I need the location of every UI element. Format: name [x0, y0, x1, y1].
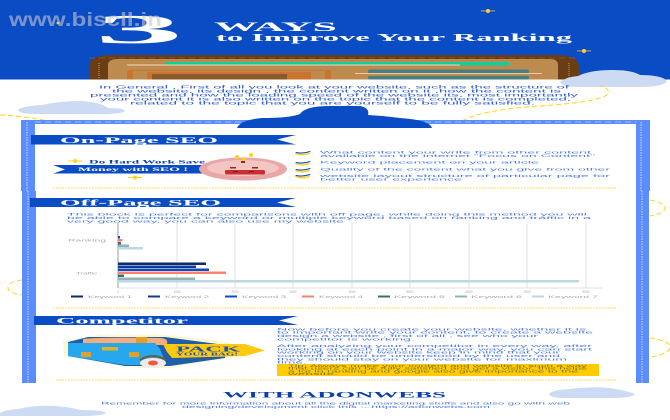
- on-page checklist text: better user experience: [320, 178, 462, 182]
- competitor text: time.: [277, 360, 307, 364]
- bar chart: 8000: [582, 290, 590, 294]
- competitor text: design a website , first of all , see who your: [277, 334, 541, 338]
- bar chart: 2000: [231, 290, 239, 294]
- chart legend: Keyword 7: [548, 295, 599, 299]
- footer heading: WITH ADONWEBS: [223, 389, 446, 399]
- watermark: www.biscll.in: [8, 10, 162, 31]
- dashed path decoration: [0, 86, 670, 357]
- section banner: Off-Page SEO: [30, 198, 296, 208]
- tip callout: a lot in ranking and google also give importance to the: [288, 369, 579, 373]
- chart legend: Keyword 3: [242, 295, 287, 299]
- tip callout: [277, 364, 599, 376]
- tip callout: website.: [288, 372, 338, 376]
- bar chart: [68, 223, 603, 294]
- frame: [21, 120, 650, 383]
- intro paragraph: the website, its design , the content written on it ,how the content is: [112, 88, 561, 93]
- title: [95, 6, 574, 52]
- chart legend: Keyword 4: [319, 295, 364, 299]
- off-page text: [67, 212, 595, 223]
- title: 3: [95, 6, 183, 52]
- off-page text: This block is perfect for comparisons with off page, while doing this method you will: [67, 212, 588, 216]
- competitor text: competitor is working.: [277, 337, 415, 341]
- title: to Improve Your Ranking: [216, 33, 574, 44]
- cloud: bottom right: [549, 387, 635, 398]
- icon: pack your bag: YOUR BAG!: [176, 352, 238, 356]
- dashed dividers: [53, 188, 617, 380]
- footer text: designing/development click this :- https://adonwebs.com: [182, 405, 490, 409]
- icon: wallet: [89, 55, 579, 80]
- chart legend: Keyword 2: [165, 295, 210, 299]
- section banner: On-Page SEO: [31, 135, 296, 145]
- icon: pig: [199, 153, 287, 180]
- icons: check marks: [296, 152, 310, 178]
- intro paragraph: presented and how the loading speed of the website its, most importantly: [90, 92, 582, 97]
- intro paragraph: your content it is also written on the topic that the content is completed,: [100, 96, 571, 101]
- chart legend: [71, 295, 599, 299]
- section banner: Competitor: Competitor: [56, 316, 189, 326]
- competitor text: working on your website keep in mind that your: [277, 351, 563, 355]
- bar chart: 4000: [348, 290, 356, 294]
- competitor text: Now before you create your website, whether it is: [277, 327, 587, 331]
- intro paragraph: related to the topic that you are yourself to be fully satisfied.: [130, 100, 535, 106]
- bar chart: Ranking: [68, 238, 107, 242]
- savings slogan: Money with SEO !: [78, 167, 188, 173]
- icon: pack your bag: [63, 335, 265, 368]
- section banner: Competitor: [34, 316, 298, 326]
- competitor text: content should be understood by the user and: [277, 354, 560, 358]
- chart legend: Keyword 5: [394, 295, 446, 299]
- savings slogan: [53, 159, 206, 180]
- savings slogan: Do Hard Work Save: [89, 159, 206, 165]
- competitor text: to important write your content, to create a website: [277, 331, 593, 335]
- cloud: top left: [18, 101, 125, 114]
- competitor text: After analyzing your competitor in every way, after: [277, 344, 595, 348]
- off-page text: very good way, you can also use my website: [67, 219, 344, 223]
- cloud: top right: [560, 70, 667, 87]
- on-page checklist text: Quality of the content what you give from other: [320, 168, 613, 172]
- bar chart: 7000: [523, 290, 531, 294]
- chart legend: Keyword 6: [471, 295, 523, 299]
- tip callout: Tip: Always make your content and website in such a way: [288, 364, 588, 368]
- stars: [57, 9, 591, 53]
- intro paragraph: In General , First of all you look at your website, such as the structure of: [99, 84, 572, 90]
- bar chart: 1000: [173, 290, 181, 294]
- section banner: Off-Page SEO: Off-Page SEO: [60, 198, 222, 208]
- bar chart: 6000: [465, 290, 473, 294]
- on-page checklist text: Keyword placement on your article: [320, 160, 539, 164]
- on-page checklist text: [320, 150, 613, 182]
- bar chart: 0: [117, 290, 119, 294]
- on-page checklist text: available on the internet "Focus on Content": [320, 154, 598, 158]
- chart legend: Keyword 1: [88, 295, 133, 299]
- competitor text: [277, 327, 595, 364]
- tip callout: that users can be fully satisfied and get a visitor, this helps: [288, 367, 588, 371]
- intro paragraph: [90, 84, 582, 106]
- footer text: Remember for more information about all the digital marketing stuffs and also go with web: [101, 402, 570, 406]
- title: WAYS: [214, 19, 337, 34]
- section banner: On-Page SEO: On-Page SEO: [60, 135, 219, 145]
- cloud: bottom left: [0, 406, 106, 416]
- footer text: [101, 402, 570, 409]
- icon: pack your bag: PACK: [176, 345, 242, 353]
- off-page text: be able to compare a keyword or multiple keyword based on ranking and traffic in a: [67, 216, 595, 220]
- blue blob: [237, 106, 432, 128]
- competitor text: they should stay on your website for maximum: [277, 357, 567, 361]
- on-page checklist text: website layout structure of particular page for: [320, 174, 613, 178]
- header background: [0, 0, 670, 80]
- on-page checklist text: What content your write from other content: [320, 150, 591, 154]
- bar chart: 5000: [406, 290, 414, 294]
- bar chart: Traffic: [76, 272, 98, 276]
- competitor text: looking at each point in a major way, you can start: [277, 347, 592, 351]
- bar chart: 3000: [289, 290, 297, 294]
